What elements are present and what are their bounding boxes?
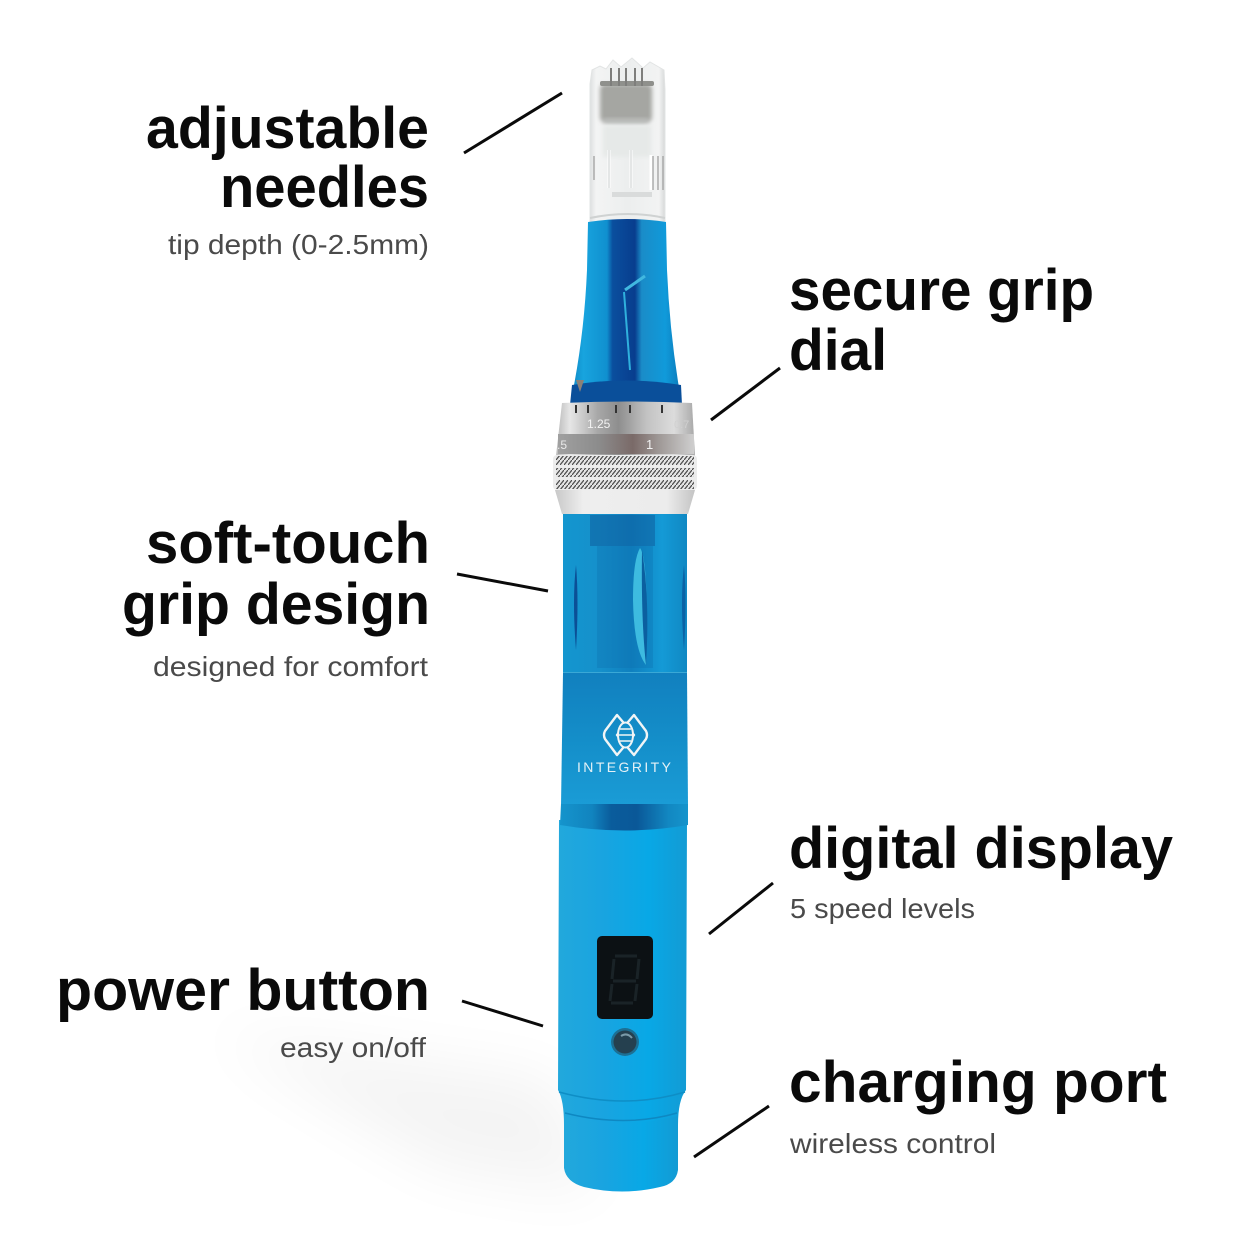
label: digital display: digital display: [789, 816, 1173, 881]
charging base: [564, 1116, 678, 1192]
dark band: [560, 804, 688, 830]
label: power button: [56, 958, 430, 1063]
label: digital display: 5 speed levels: [790, 893, 975, 924]
product: microneedling pen: [553, 58, 697, 1192]
depth dial ring: [556, 402, 695, 456]
clear needle cartridge: [590, 58, 665, 224]
label: charging port: [789, 1050, 1167, 1159]
logo wordmark: INTEGRITY: [577, 759, 672, 775]
label: soft-touch grip design: designed for comfort: [153, 651, 428, 682]
middle section with logo: [561, 673, 688, 806]
label: secure grip dial: [789, 258, 1094, 383]
label: power button: easy on/off: [280, 1032, 426, 1063]
label: soft-touch grip design: [122, 511, 430, 682]
label: adjustable needles: [146, 96, 429, 260]
label: adjustable needles: tip depth (0-2.5mm): [168, 229, 429, 260]
depth dial ring: 1.25: [587, 417, 611, 431]
power button: [611, 1028, 639, 1056]
lower barrel: [558, 820, 687, 1125]
label: secure grip dial: dial: [789, 318, 887, 383]
digital display: [597, 936, 653, 1019]
pointer lines: [457, 93, 780, 1157]
label: soft-touch grip design: soft-touch: [146, 511, 430, 576]
label: secure grip dial: secure grip: [789, 258, 1094, 323]
pen cast shadow: [210, 1030, 600, 1195]
depth dial ring: 1: [646, 437, 653, 452]
label: adjustable needles: adjustable: [146, 96, 429, 161]
label: digital display: [789, 816, 1173, 924]
label: charging port: charging port: [789, 1050, 1167, 1115]
label: adjustable needles: needles: [220, 155, 429, 220]
logo: integrity mark: [604, 715, 647, 755]
depth dial ring: .5: [557, 438, 567, 452]
upper blue barrel: [570, 219, 682, 405]
label: power button: power button: [56, 958, 430, 1023]
label: charging port: wireless control: [789, 1128, 996, 1159]
knurled grip dial: [553, 455, 697, 514]
depth dial ring: 0.7: [674, 419, 689, 431]
label: soft-touch grip design: grip design: [122, 572, 430, 637]
soft-touch grip section: [563, 514, 687, 673]
